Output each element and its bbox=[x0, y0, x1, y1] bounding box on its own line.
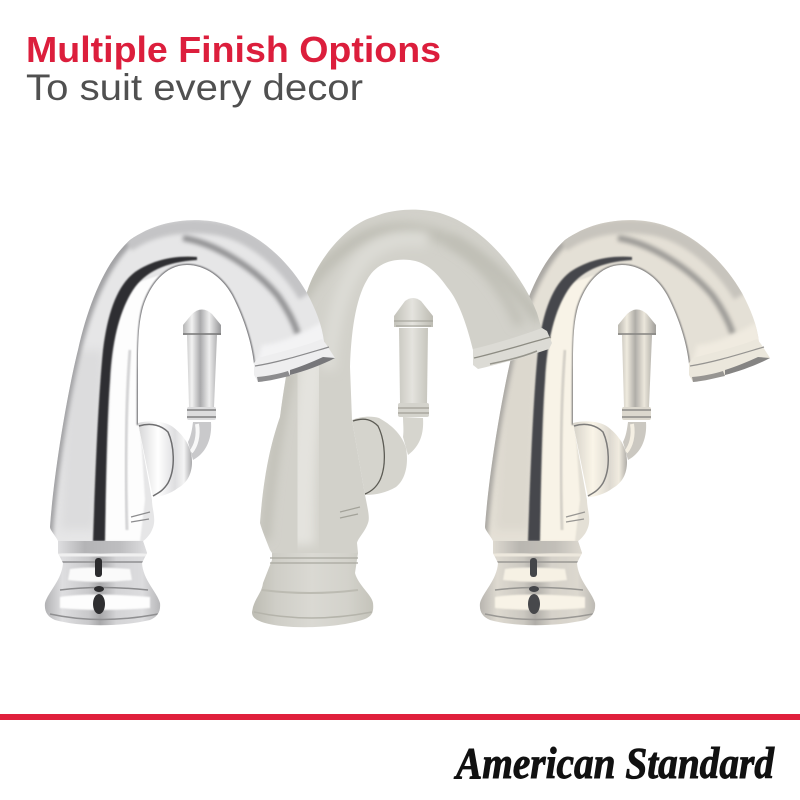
subtitle: To suit every decor bbox=[26, 67, 363, 108]
handle bbox=[403, 417, 423, 455]
logo mark on body bbox=[340, 507, 360, 518]
faucet: chrome (left) bbox=[40, 220, 335, 630]
spout and stem bbox=[260, 210, 542, 553]
faucet: polished nickel (right) bbox=[475, 220, 770, 630]
spout collar bbox=[473, 328, 552, 369]
divider line bbox=[0, 714, 800, 720]
hub bbox=[352, 417, 407, 495]
title: Multiple Finish Options bbox=[26, 29, 441, 70]
base bbox=[252, 553, 373, 627]
faucet: brushed nickel (center) bbox=[252, 210, 552, 627]
